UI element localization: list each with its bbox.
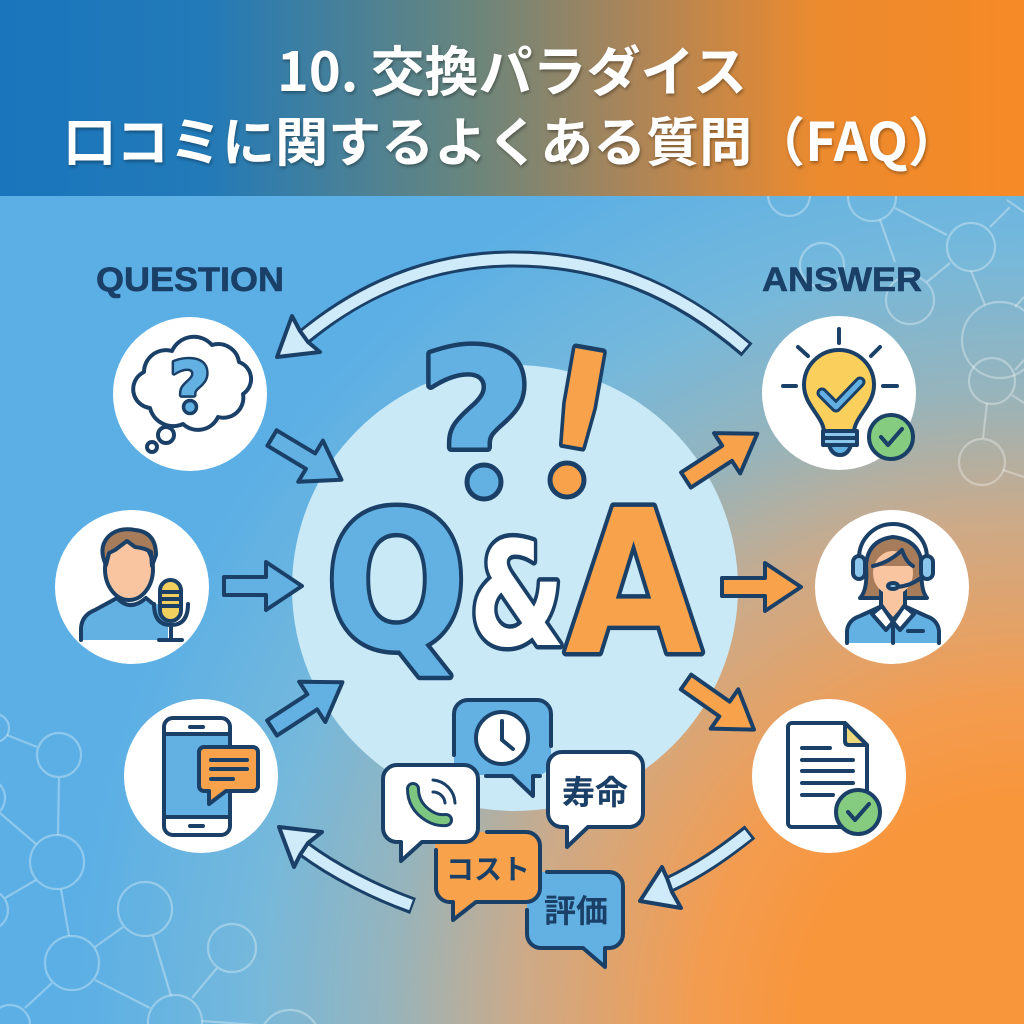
title: 10. 交換パラダイス (277, 28, 747, 107)
icon: person (81, 529, 168, 640)
icon: green check badge (869, 415, 913, 459)
heading: QUESTION: QUESTION (96, 261, 284, 299)
panel: idea icon (762, 316, 916, 470)
icon: question mark: ? (169, 346, 211, 430)
decorative network bottom left (0, 714, 320, 1024)
title banner (0, 0, 1024, 196)
speech bubble: clock (454, 700, 551, 796)
icon: big exclamation mark: ! (520, 305, 632, 547)
arrow: center to document (672, 662, 768, 749)
icon: green check badge (836, 790, 880, 834)
decorative network top right (768, 173, 1024, 485)
arrow: phone to center (259, 662, 356, 748)
label: 評価: 評価 (544, 886, 608, 932)
panel: document icon (752, 699, 906, 853)
arrow: thought to center (260, 417, 354, 500)
icon: smartphone (164, 718, 230, 835)
icon: question mark (172, 356, 209, 416)
arrow: top curved, answer back to question (277, 259, 747, 357)
icon: clock (476, 712, 528, 764)
letter Q: Q (325, 473, 468, 694)
icon: orange chat bubble (199, 747, 258, 804)
icon: telephone handset (413, 780, 455, 820)
ampersand: & (469, 511, 565, 680)
speech bubble: phone (383, 765, 478, 861)
arrow: bottom right curved (640, 832, 750, 908)
icon: support agent (847, 524, 939, 643)
icon: microphone (154, 580, 188, 640)
arrow: bottom left curved (279, 827, 413, 906)
speech bubble: コスト (435, 832, 540, 920)
letter A: A (565, 468, 702, 700)
panel: phone chat icon (124, 699, 278, 853)
icon: light bulb (783, 329, 897, 455)
icon: thought cloud (133, 337, 251, 452)
Q&A lettering (325, 468, 702, 700)
panel: speaker icon (55, 510, 209, 664)
speech bubble: 評価 (527, 872, 623, 967)
label: コスト: コスト (446, 848, 530, 888)
arrow: center to agent (722, 563, 801, 611)
speech bubble: 寿命 (548, 752, 643, 847)
panel: support agent icon (815, 510, 969, 664)
icon: big exclamation mark (548, 344, 607, 500)
icon: big question mark: ? (417, 309, 535, 547)
label: 寿命: 寿命 (562, 766, 628, 814)
panel: thought icon (113, 317, 267, 471)
heading: ANSWER: ANSWER (762, 261, 922, 299)
icon: document (788, 723, 867, 827)
icon: big question mark (426, 341, 527, 502)
arrow: center to bulb (673, 414, 770, 500)
central light circle (292, 365, 738, 811)
arrow: speaker to center (224, 562, 302, 610)
title: 口コミに関するよくある質問（FAQ） (63, 101, 961, 177)
